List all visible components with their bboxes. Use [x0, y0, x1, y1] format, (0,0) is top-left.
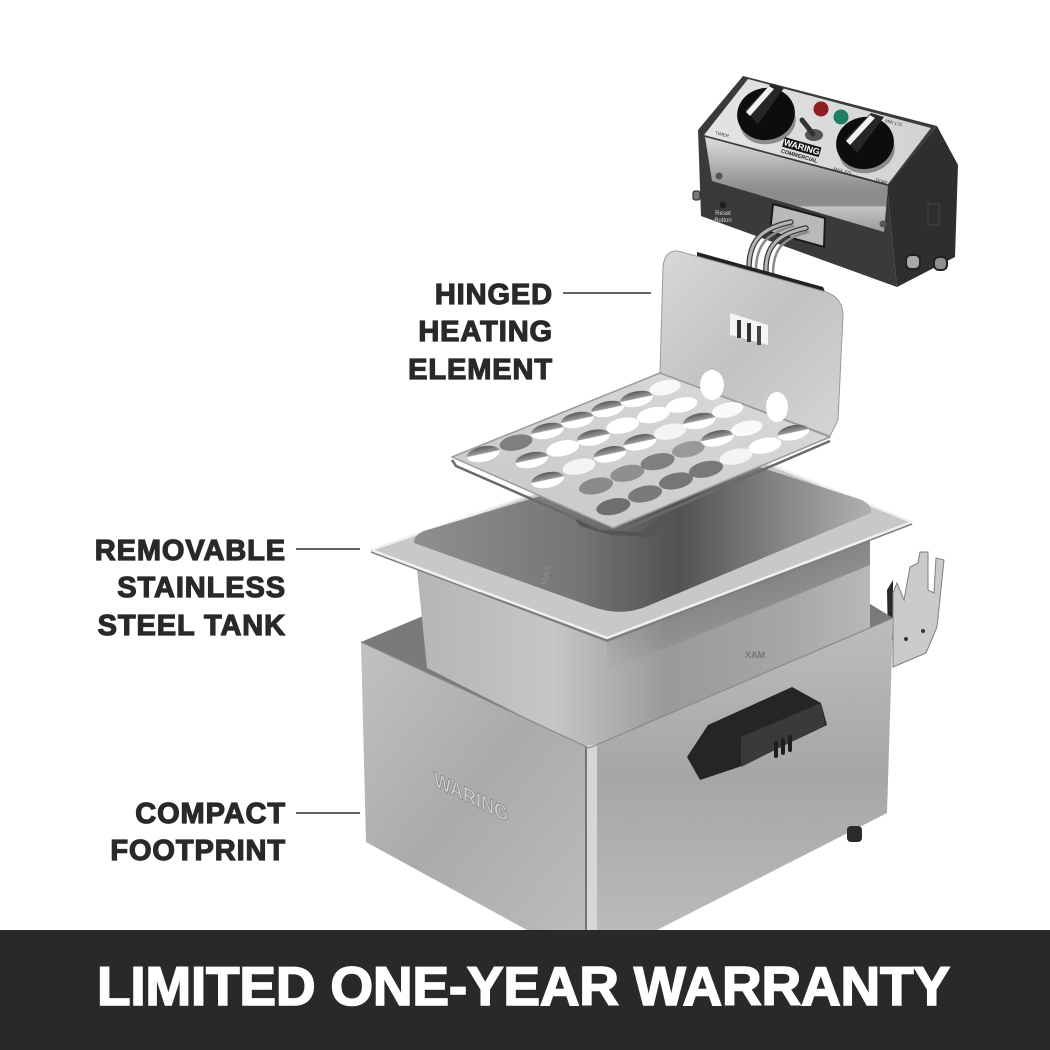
panel scale text: TEMP	[875, 177, 888, 185]
waring badge	[780, 137, 822, 165]
perforated grid plate	[452, 370, 830, 532]
front corner highlight	[585, 744, 597, 930]
warranty banner	[0, 930, 1050, 1050]
callout: hinged heating element: ELEMENT	[408, 354, 553, 386]
upright plate	[660, 251, 843, 436]
tank body	[417, 540, 870, 750]
warranty banner: LIMITED ONE-YEAR WARRANTY	[97, 955, 950, 1017]
foot	[847, 826, 862, 842]
callout: removable stainless steel tank: STEEL TANK	[98, 610, 286, 642]
tank well	[414, 448, 871, 612]
plate notches	[700, 370, 724, 400]
screw left	[716, 172, 722, 180]
heating element plate	[452, 251, 843, 537]
housing right face	[589, 618, 893, 930]
stainless front strip	[705, 137, 888, 232]
callout: compact footprint: FOOTPRINT	[110, 835, 286, 867]
tank rim	[371, 436, 912, 638]
control head	[693, 76, 958, 287]
corner shadow line	[585, 747, 587, 930]
brushed metal texture	[361, 618, 893, 930]
panel scale text: TIMER	[715, 130, 730, 139]
side latch outline	[928, 204, 939, 225]
housing left face	[361, 642, 589, 930]
panel scale text: MIN 175	[885, 118, 903, 127]
rear pins	[693, 191, 947, 270]
tank max mark: MAX	[745, 650, 765, 660]
grid holes	[465, 377, 810, 518]
power light	[814, 102, 828, 116]
waring badge: WARING	[783, 137, 821, 157]
callout: compact footprint	[110, 798, 360, 867]
callout: compact footprint: COMPACT	[135, 798, 286, 830]
fork bracket	[887, 552, 944, 667]
element tubes	[749, 222, 808, 274]
housing rim line	[361, 618, 893, 748]
reset button	[714, 202, 732, 224]
timer knob	[732, 83, 800, 149]
callout: hinged heating element: HEATING	[418, 316, 553, 348]
ready light	[834, 110, 848, 124]
waring badge: COMMERCIAL	[780, 149, 819, 165]
callout: removable stainless steel tank: STAINLESS	[117, 572, 286, 604]
embossed logo: WARING	[434, 767, 508, 827]
callout: hinged heating element	[408, 279, 651, 386]
reset button: Button	[714, 218, 732, 224]
reset button: Reset	[715, 211, 731, 217]
housing interior	[361, 500, 893, 748]
plate slot	[730, 313, 768, 345]
outer housing	[361, 618, 893, 930]
head housing side face	[887, 126, 958, 287]
panel scale text	[715, 118, 903, 185]
callout: removable stainless steel tank	[95, 535, 360, 642]
callout: removable stainless steel tank: REMOVABLE	[95, 535, 286, 567]
stainless steel tank	[371, 436, 912, 750]
callout: hinged heating element: HINGED	[435, 279, 553, 311]
screw right	[880, 220, 886, 228]
dark top hinge	[697, 252, 826, 294]
head housing front face	[698, 76, 937, 287]
element bracket	[770, 204, 825, 247]
handle	[687, 687, 827, 780]
shadow under rim	[607, 540, 870, 672]
well max mark: MAX	[539, 564, 553, 586]
panel scale text: MAX 375	[833, 166, 852, 176]
rim outer edge	[371, 524, 912, 641]
plate underside clips	[575, 518, 668, 537]
stainless control panel	[704, 79, 931, 184]
toggle switch	[802, 120, 823, 141]
temperature knob	[831, 112, 899, 178]
